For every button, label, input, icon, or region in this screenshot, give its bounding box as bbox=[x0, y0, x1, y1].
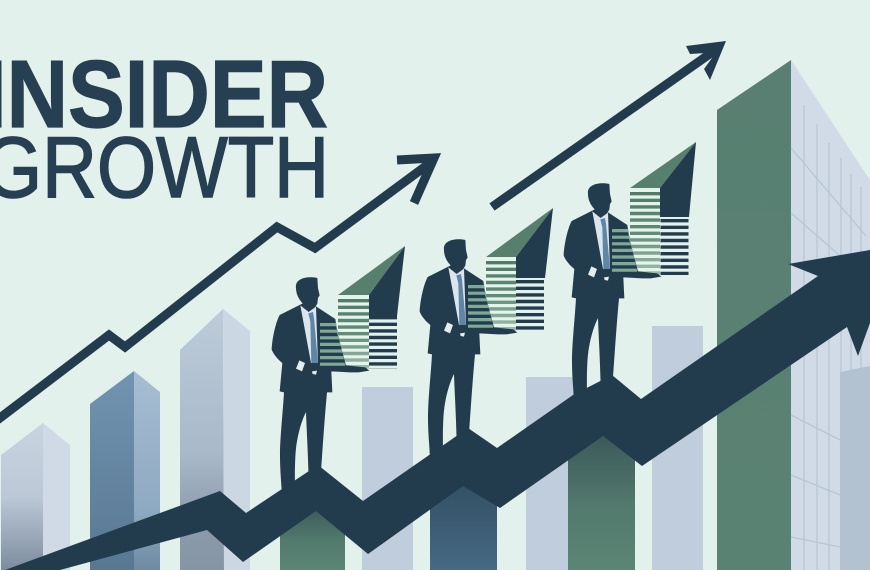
bar 9: green column bbox=[568, 430, 635, 570]
bar 8: dark blue column bbox=[430, 480, 497, 570]
stripes over jacket 2 bbox=[468, 285, 494, 328]
tall green tower face bbox=[717, 60, 791, 570]
stripes over jacket 3 bbox=[612, 229, 638, 272]
stack 2 bbox=[486, 208, 553, 331]
stripes over jacket 1 bbox=[320, 323, 346, 366]
lower right block bbox=[840, 366, 870, 570]
businessman 3 with report stack bbox=[564, 142, 696, 402]
figure 1 bbox=[272, 277, 369, 496]
thin trend line arrow bbox=[0, 158, 434, 421]
stack 1 bbox=[338, 246, 405, 369]
businessman 2 with report stack bbox=[420, 208, 553, 458]
stack 3 bbox=[630, 142, 696, 275]
bar 3: grey 3D column bbox=[180, 309, 250, 570]
figure 2 bbox=[420, 239, 517, 458]
bar 5: pale flat column bbox=[526, 377, 586, 570]
title bbox=[0, 41, 329, 216]
bar 1: pale 3D column bbox=[1, 423, 70, 570]
bar 4: pale flat column bbox=[362, 387, 413, 570]
large zigzag growth arrow bbox=[0, 250, 870, 570]
bar 6: pale flat column bbox=[652, 326, 703, 570]
bar 2: blue 3D column bbox=[90, 371, 160, 570]
figure 3 bbox=[564, 183, 661, 402]
bar 7: dark green column bbox=[280, 505, 345, 570]
upper trend arrow bbox=[492, 41, 726, 207]
businessman 1 with report stack bbox=[272, 246, 405, 496]
glass building side with grid bbox=[791, 60, 870, 570]
